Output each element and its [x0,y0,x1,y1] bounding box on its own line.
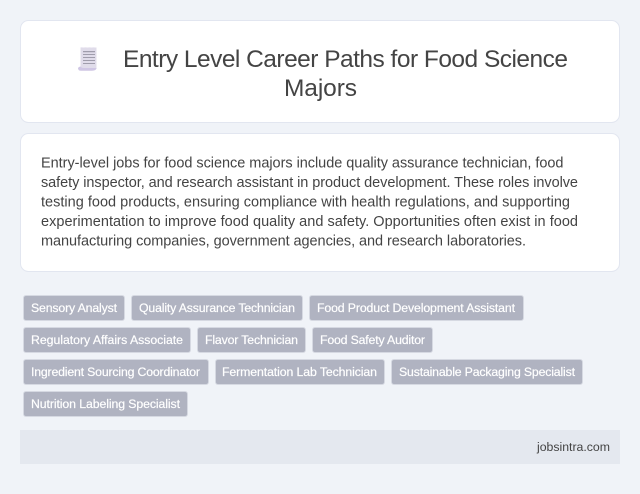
tag: Nutrition Labeling Specialist [24,392,188,416]
text block: description: testing food products, ensuring compliance with health regulations, and supporting [41,194,570,210]
text block: description: Entry-level jobs for food science majors include quality assurance technician, food [41,155,564,171]
tag: Food Safety Auditor: Food Safety Auditor [320,333,425,347]
panel: career tags [24,296,582,416]
tag: Flavor Technician [198,328,306,352]
tag: Fermentation Lab Technician [216,360,384,384]
tag: Nutrition Labeling Specialist: Nutrition Labeling Specialist [31,397,181,411]
tag: Food Product Development Assistant: Food Product Development Assistant [317,301,516,315]
tag: Quality Assurance Technician [132,296,302,320]
panel: header [20,20,620,122]
tag: Food Safety Auditor [312,328,432,352]
panel: description [20,134,620,272]
title [123,46,568,102]
icon: document scroll [78,47,96,71]
tag: Sustainable Packaging Specialist [392,360,582,384]
text block: description: safety inspector, and research assistant in product development. These roles involve [41,175,578,191]
footer text: jobsintra.com [536,440,610,454]
tag: Food Product Development Assistant [310,296,524,320]
tag: Ingredient Sourcing Coordinator [24,360,208,384]
tag: Flavor Technician: Flavor Technician [205,333,298,347]
footer [20,430,620,464]
tag: Sensory Analyst: Sensory Analyst [31,301,118,315]
tag: Sustainable Packaging Specialist: Sustainable Packaging Specialist [399,365,576,379]
tag: Sensory Analyst [24,296,124,320]
title: Majors [284,75,357,102]
text block: description: experimentation to improve food quality and safety. Opportunities often exist in food [41,214,578,230]
tag: Ingredient Sourcing Coordinator: Ingredient Sourcing Coordinator [31,365,200,379]
tag: Quality Assurance Technician: Quality Assurance Technician [139,301,295,315]
tag: Regulatory Affairs Associate [24,328,190,352]
title: Entry Level Career Paths for Food Science [123,46,568,73]
text block: description [41,155,578,250]
tag: Regulatory Affairs Associate: Regulatory Affairs Associate [31,333,183,347]
tag: Fermentation Lab Technician: Fermentation Lab Technician [222,365,377,379]
text block: description: manufacturing companies, government agencies, and research laboratories. [41,234,526,250]
